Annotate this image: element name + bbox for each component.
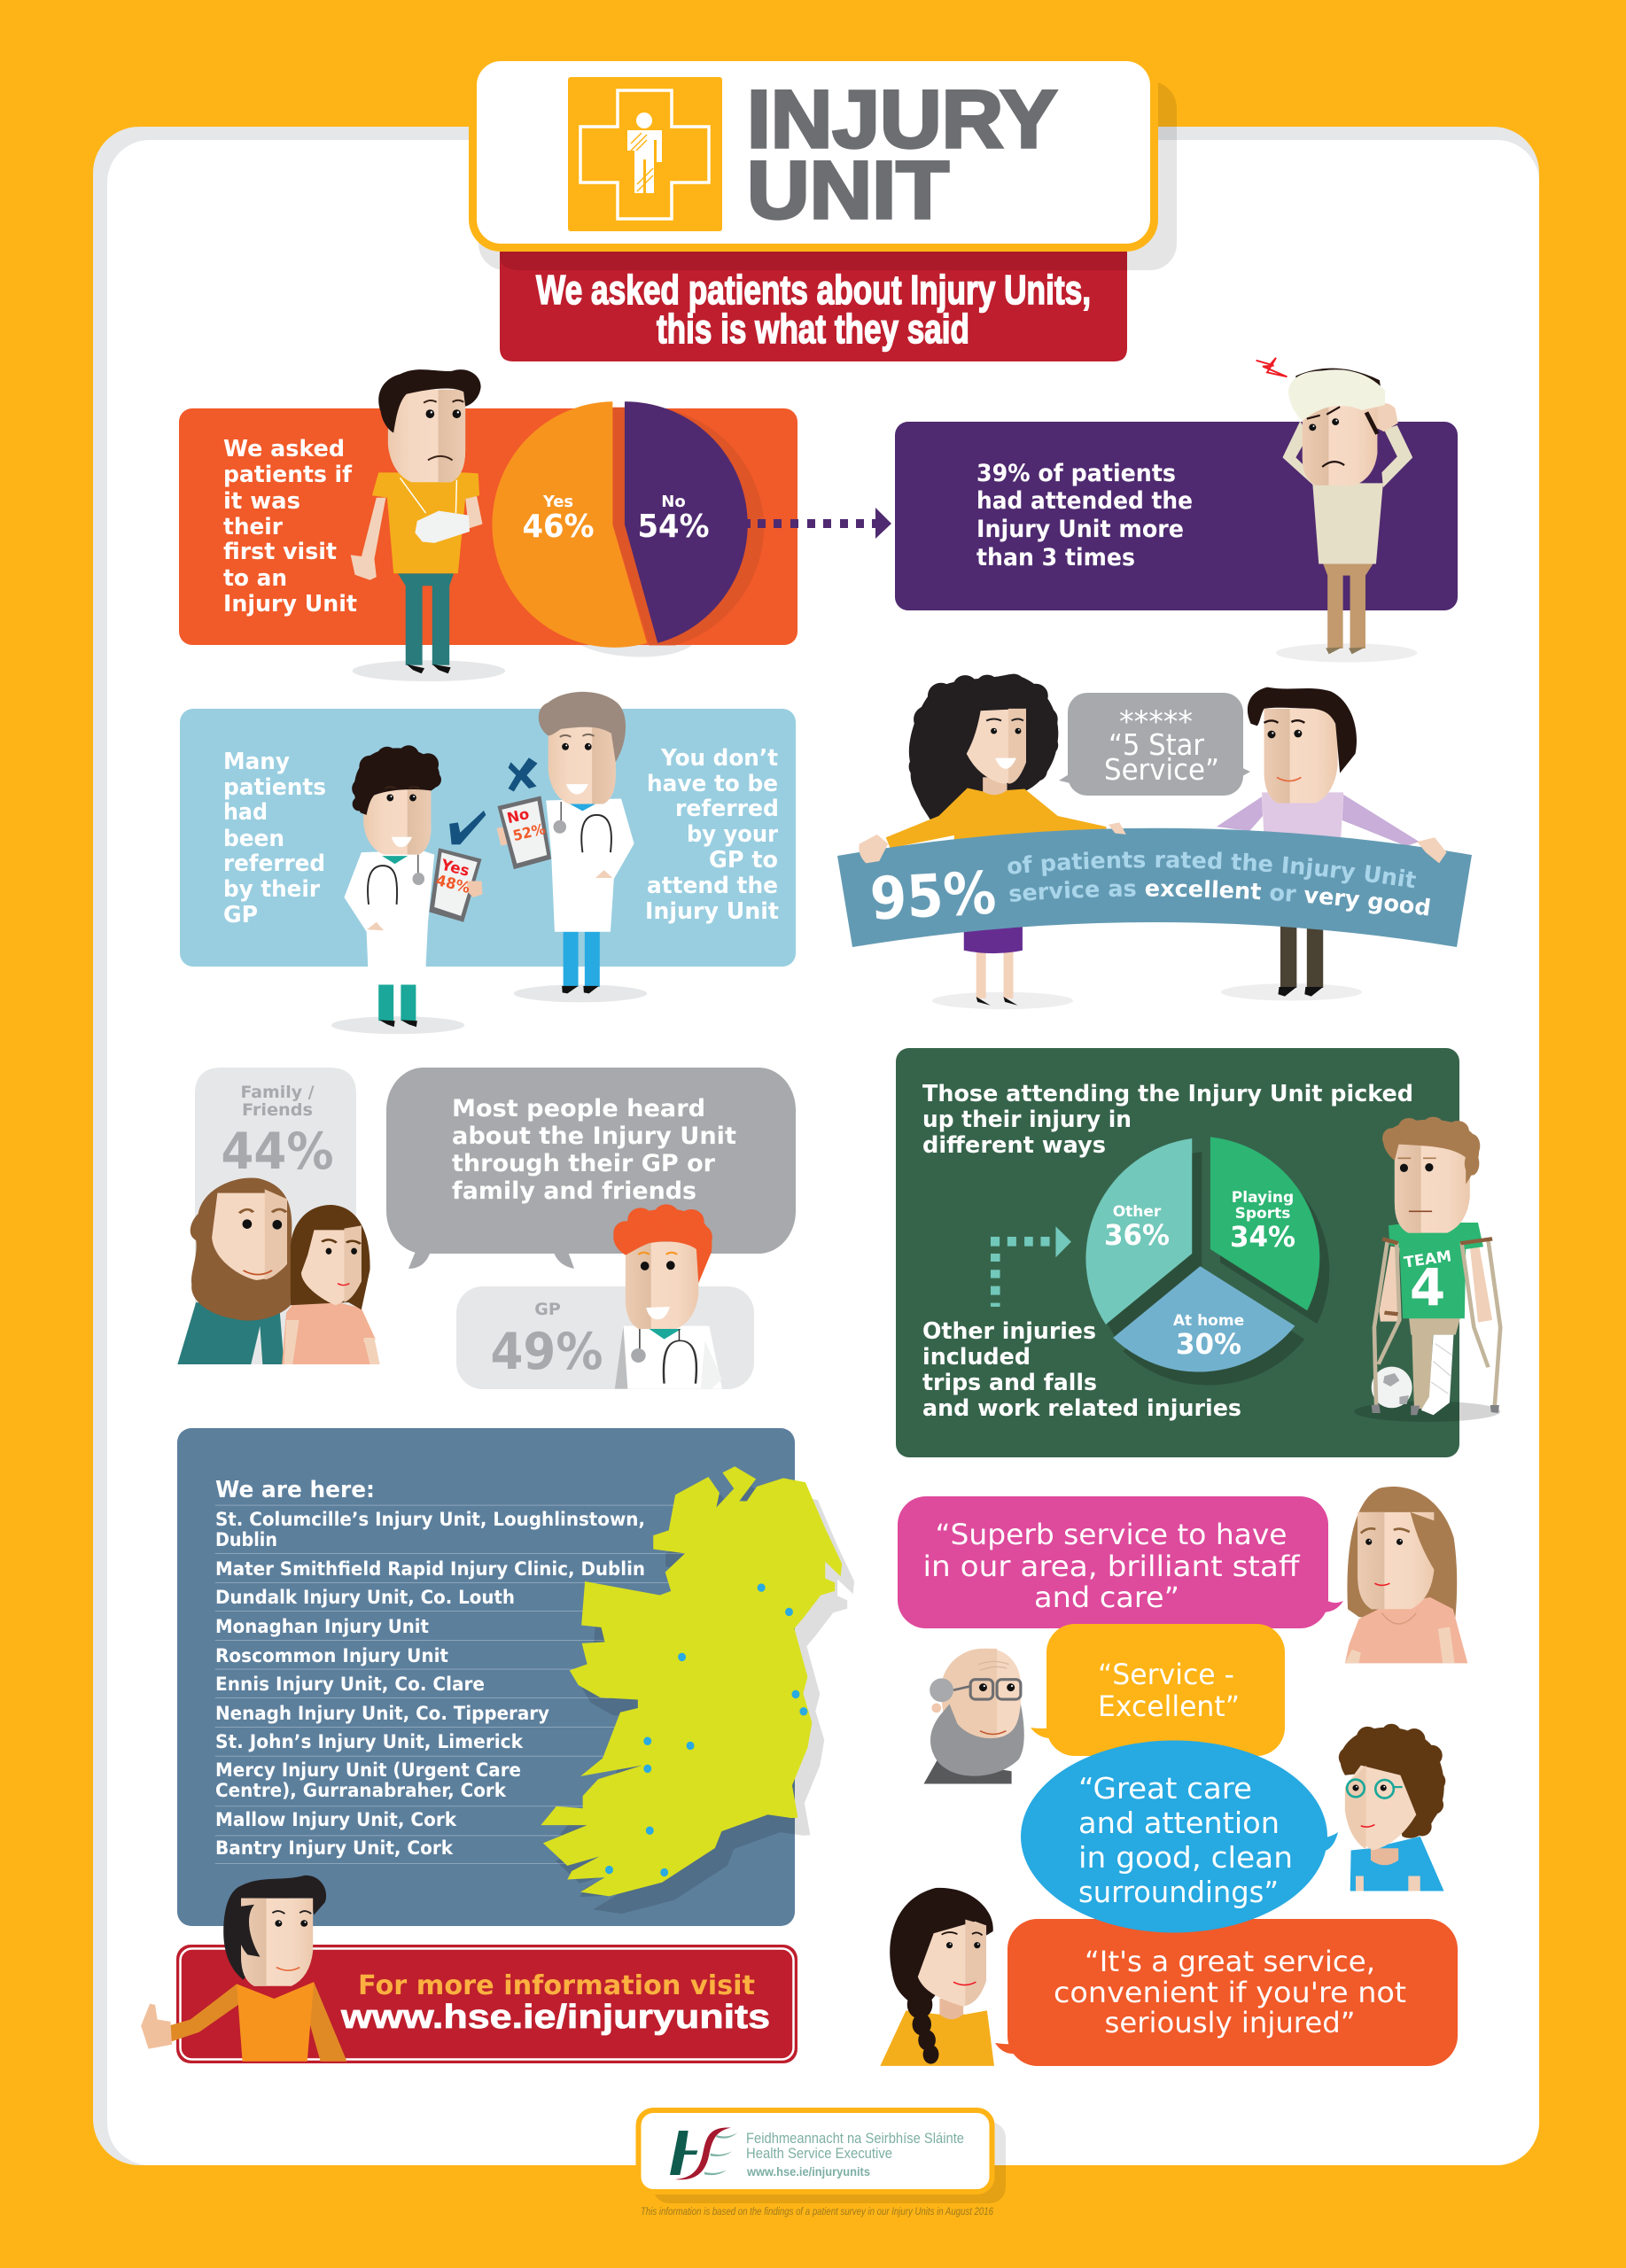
first visit text: to an — [223, 565, 287, 592]
quote: great care: in good, clean — [1078, 1840, 1293, 1875]
figure: doctor with yes clipboard: Yes — [439, 856, 471, 880]
referral text right: attend the — [647, 873, 778, 899]
panel: GP 49 percent: 49% — [491, 1323, 603, 1381]
referral text left: GP — [223, 902, 258, 928]
jersey text: TEAM — [1403, 1247, 1452, 1272]
first visit text: We asked — [223, 436, 345, 462]
referral text left: been — [223, 826, 284, 852]
quote: service excellent: “Service - — [1098, 1658, 1234, 1691]
figure: bearded man and woman — [177, 1178, 380, 1364]
banner: 95 percent rating: 95% — [868, 858, 998, 934]
pie chart: injury causes: At home — [1173, 1312, 1244, 1330]
quote: great service: “It's a great service, — [1085, 1945, 1375, 1978]
quote: great care — [995, 1740, 1458, 2066]
figure: boy on crutches — [1354, 1117, 1500, 1422]
referral text right: have to be — [647, 771, 778, 797]
callout: 5 star service — [1059, 693, 1250, 796]
referral text left: referred — [223, 850, 325, 877]
organisation name: Health Service Executive — [746, 2145, 892, 2162]
first visit text: their — [223, 514, 283, 540]
referral text right: referred — [675, 796, 779, 822]
locations list: Mallow Injury Unit, Cork — [215, 1809, 457, 1830]
injury text bottom: and work related injuries — [922, 1395, 1241, 1422]
panel: family and friends: Friends — [242, 1100, 313, 1120]
panel: how injuries happened — [896, 1048, 1500, 1457]
first visit text: Injury Unit — [223, 591, 357, 617]
locations list: Centre), Gurranabraher, Cork — [215, 1780, 507, 1801]
callout: most people heard: through their GP or — [452, 1150, 716, 1177]
white content sheet — [93, 127, 1539, 2165]
pie chart: injury causes: Sports — [1235, 1205, 1290, 1223]
referral text right: GP to — [709, 847, 778, 874]
first visit text — [223, 436, 357, 617]
figure: bald man with glasses — [923, 1649, 1024, 1784]
icon: HSE logo — [670, 2128, 737, 2179]
callout: 5 star service: ***** — [1119, 704, 1193, 740]
locations list: Roscommon Injury Unit — [215, 1645, 448, 1666]
locations list: Monaghan Injury Unit — [215, 1616, 429, 1637]
banner: 95 percent rating: service as excellent or very good — [1009, 880, 1430, 916]
first visit text: it was — [223, 488, 300, 515]
quote: great service: seriously injured” — [1104, 2006, 1356, 2039]
figure: man pointing to website — [141, 1876, 346, 2062]
locations list: We are here: — [215, 1477, 375, 1503]
pie chart: first visit — [492, 401, 764, 648]
referral text left: patients — [223, 774, 326, 801]
injury text top: Those attending the Injury Unit picked — [922, 1081, 1413, 1107]
referral text right: by your — [687, 821, 778, 848]
locations list: Bantry Injury Unit, Cork — [215, 1837, 454, 1859]
logo wordmark: INJURY — [747, 74, 1057, 165]
banner: 95 percent rating — [837, 822, 1472, 947]
figure: man holding banner — [1217, 687, 1420, 1000]
quote: superb service — [898, 1496, 1343, 1628]
referral text right: You don’t — [660, 745, 778, 772]
referral text left: Many — [223, 749, 290, 775]
organisation name: Feidhmeannacht na Seirbhíse Sláinte — [746, 2130, 964, 2147]
call to action: more information — [176, 1945, 797, 2063]
callout: 5 star service: “5 Star — [1109, 727, 1204, 762]
organisation name — [746, 2130, 964, 2179]
locations list — [215, 1477, 645, 1859]
organisation name: www.hse.ie/injuryunits — [746, 2164, 870, 2179]
referral text left — [223, 749, 326, 928]
quote: great service: convenient if you're not — [1054, 1976, 1406, 2009]
subtitle banner — [500, 252, 1127, 361]
figure: ginger doctor — [613, 1204, 722, 1389]
locations list: St. John’s Injury Unit, Limerick — [215, 1731, 524, 1752]
injury text bottom: included — [922, 1344, 1031, 1371]
figure: curly-haired woman with glasses — [1339, 1724, 1445, 1891]
quote: service excellent — [1031, 1624, 1285, 1756]
locations list: Dublin — [215, 1529, 277, 1550]
callout: most people heard: Most people heard — [452, 1095, 705, 1122]
panel: family and friends — [195, 1068, 356, 1364]
pie chart: first visit: Yes — [542, 493, 573, 511]
injury text top: different ways — [922, 1132, 1106, 1159]
injury text top: up their injury in — [922, 1107, 1132, 1133]
first visit text: patients if — [223, 462, 353, 488]
panel: GP 49 percent: GP — [534, 1300, 561, 1319]
figure: woman with curly hair holding banner — [886, 674, 1106, 1009]
subtitle banner: We asked patients about Injury Units, — [536, 267, 1091, 313]
pie chart: injury causes: Other — [1113, 1203, 1162, 1221]
locations list: Mercy Injury Unit (Urgent Care — [215, 1759, 521, 1781]
arrow: dotted to other slice — [991, 1226, 1071, 1307]
quote: superb service: “Superb service to have — [936, 1518, 1287, 1551]
panel: first visit — [179, 369, 797, 681]
banner: 95 percent rating: of patients rated the Injury Unit — [1007, 851, 1416, 888]
figure: woman with braid — [880, 1888, 994, 2066]
pie chart: first visit: No — [661, 493, 686, 511]
map of Ireland with unit markers — [541, 1466, 854, 1914]
quote: great care: and attention — [1078, 1806, 1280, 1840]
pie chart: injury causes: 30% — [1176, 1327, 1241, 1361]
panel: family and friends: Family / — [241, 1083, 315, 1102]
figure: doctor with yes clipboard: 48% — [434, 872, 472, 897]
footer logo box — [638, 2110, 1006, 2203]
quote: great care: surroundings” — [1078, 1875, 1279, 1909]
quote: great care: “Great care — [1078, 1771, 1252, 1806]
quote: superb service: and care” — [1034, 1581, 1179, 1614]
quote: service excellent: Excellent” — [1098, 1689, 1240, 1723]
header logo box — [473, 57, 1177, 361]
icon: injury cross — [568, 77, 722, 231]
callout: most people heard — [386, 1068, 796, 1269]
figure: doctor with yes clipboard — [331, 745, 486, 1034]
callout: 5 star service: Service” — [1104, 752, 1219, 787]
injury text bottom: Other injuries — [922, 1318, 1096, 1345]
repeat visits text: 39% of patients — [976, 460, 1176, 487]
locations list: Dundalk Injury Unit, Co. Louth — [215, 1587, 515, 1608]
injury text bottom — [922, 1318, 1241, 1422]
panel: repeat visits — [895, 358, 1458, 663]
referral text right — [645, 745, 779, 925]
locations list: Nenagh Injury Unit, Co. Tipperary — [215, 1703, 549, 1724]
repeat visits text — [976, 460, 1193, 571]
jersey text: 4 — [1410, 1257, 1445, 1317]
footnote: This information is based on the findings of a patient survey in our Injury Units in August 2016 — [641, 2207, 993, 2218]
pie chart: injury causes: 34% — [1230, 1220, 1295, 1254]
subtitle banner: this is what they said — [657, 306, 969, 352]
referral text right: Injury Unit — [645, 898, 779, 925]
panel: family and friends: 44% — [222, 1122, 333, 1181]
pie chart: first visit: 54% — [638, 509, 709, 545]
locations list: Ennis Injury Unit, Co. Clare — [215, 1674, 485, 1695]
locations list: St. Columcille’s Injury Unit, Loughlinstown, — [215, 1509, 645, 1530]
panel: locations map — [177, 1428, 854, 1926]
arrow: dotted to purple panel — [747, 508, 891, 539]
figure: woman with long hair — [1345, 1487, 1467, 1663]
injury text bottom: trips and falls — [922, 1370, 1097, 1396]
call to action: more information: For more information visit — [358, 1970, 755, 2001]
quote: great service — [1054, 1945, 1406, 2039]
logo wordmark: UNIT — [747, 145, 949, 236]
referral text left: had — [223, 799, 268, 826]
panel: GP referral — [180, 692, 796, 1034]
pie chart: injury causes: Playing — [1232, 1189, 1294, 1207]
figure: man with head bandage — [1256, 358, 1417, 663]
pie chart: injury causes — [1085, 1137, 1329, 1385]
referral text left: by their — [223, 876, 320, 903]
figure: doctor with no clipboard — [496, 692, 647, 1002]
callout: most people heard: family and friends — [452, 1177, 696, 1205]
locations divider lines — [215, 1505, 689, 1864]
call to action: more information: www.hse.ie/injuryunits — [340, 1999, 770, 2036]
quote: superb service: in our area, brilliant staff — [923, 1550, 1301, 1583]
first visit text: first visit — [223, 539, 337, 565]
figure: doctor with no clipboard: No — [505, 805, 531, 827]
panel: GP 49 percent — [456, 1286, 754, 1389]
repeat visits text: had attended the — [976, 487, 1193, 515]
pie chart: injury causes: 36% — [1104, 1218, 1170, 1252]
jersey text — [1403, 1247, 1452, 1317]
figure: doctor with no clipboard: 52% — [511, 820, 547, 844]
callout: most people heard: about the Injury Unit — [452, 1122, 736, 1150]
pie chart: first visit: 46% — [523, 509, 594, 545]
injury text top — [922, 1081, 1413, 1159]
locations list: Mater Smithfield Rapid Injury Clinic, Dublin — [215, 1558, 645, 1580]
repeat visits text: Injury Unit more — [976, 516, 1184, 543]
logo wordmark — [747, 74, 1057, 236]
repeat visits text: than 3 times — [976, 544, 1135, 571]
figure: man with arm in sling — [351, 369, 505, 681]
